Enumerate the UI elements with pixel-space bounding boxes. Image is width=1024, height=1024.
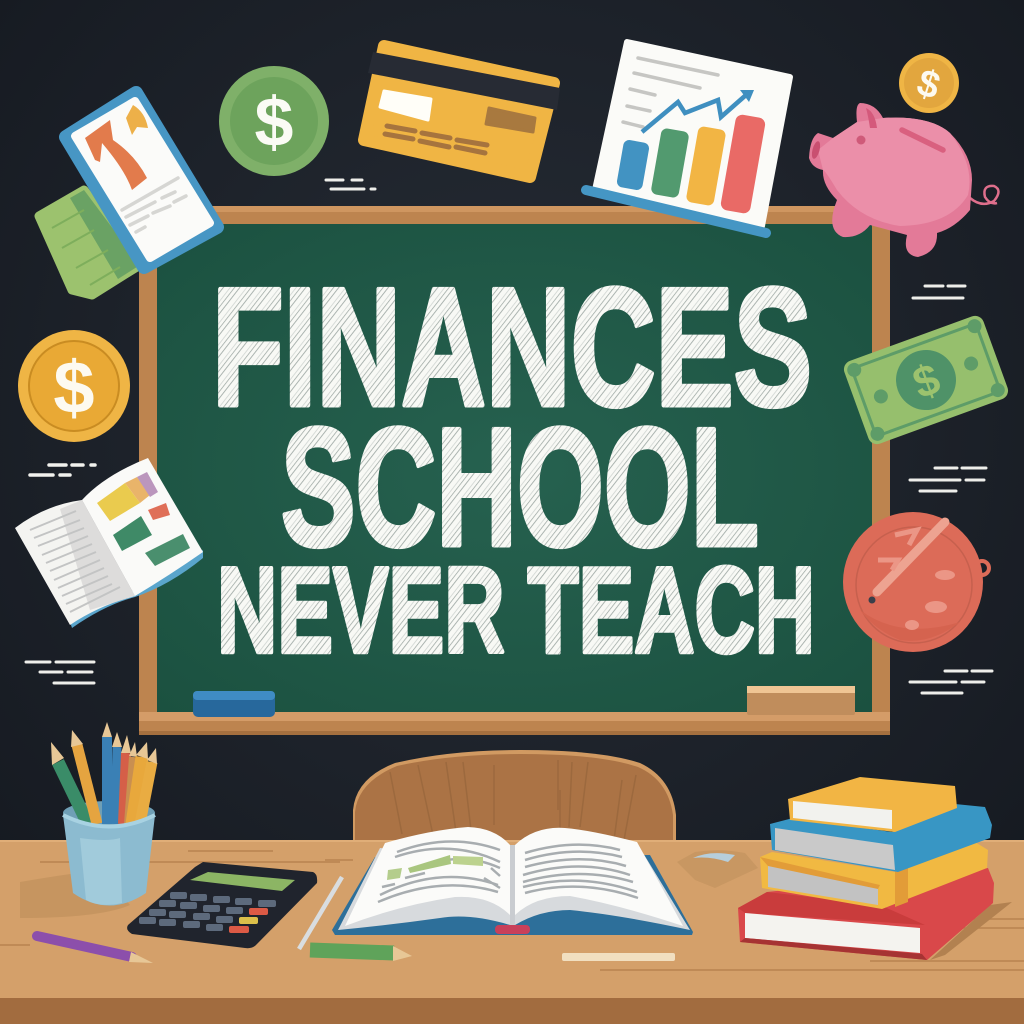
icon: green dollar coin [219, 66, 329, 176]
desk [0, 840, 1024, 1024]
icon: green dollar bill: $ [907, 354, 946, 409]
book: yellow [760, 842, 988, 909]
icon: small gold coin [899, 53, 959, 113]
icon: bar chart report [586, 42, 790, 233]
icon: broken red piggy coin [843, 512, 989, 652]
blue eraser [193, 691, 275, 717]
dashes right of board, middle [910, 468, 986, 491]
dashes right of board, bottom [910, 671, 992, 693]
icon: open book with charts [15, 458, 203, 628]
icon: green banknote behind card [39, 190, 140, 295]
dashes right of board, top [913, 286, 965, 298]
chalkboard [139, 206, 890, 735]
wooden eraser [747, 686, 855, 715]
icon: piggy bank [809, 103, 998, 257]
icon: gold dollar coin [18, 330, 130, 442]
icon: green dollar coin: $ [255, 83, 293, 161]
tape and small objects on desk [562, 850, 758, 961]
icon: gold dollar coin: $ [53, 346, 95, 429]
icon: tax document card [66, 93, 217, 267]
main title: SCHOOL [281, 393, 759, 581]
purple pencil [37, 936, 153, 963]
stack of books [738, 777, 994, 960]
dashes left, middle [30, 465, 95, 475]
icon: small gold coin: $ [912, 62, 945, 108]
book: yellow top [788, 777, 957, 832]
book: red [738, 868, 994, 960]
dashes under green coin [326, 180, 375, 189]
book: blue [770, 804, 992, 872]
chair back [353, 750, 676, 840]
main title [212, 253, 815, 678]
open book on desk [332, 827, 693, 935]
calculator [127, 862, 317, 948]
pencil cup [51, 722, 157, 906]
dashes left, bottom [26, 662, 94, 683]
icon: green dollar bill [841, 313, 1011, 447]
icon: credit card [364, 46, 560, 177]
small pencils on desk [299, 877, 412, 961]
